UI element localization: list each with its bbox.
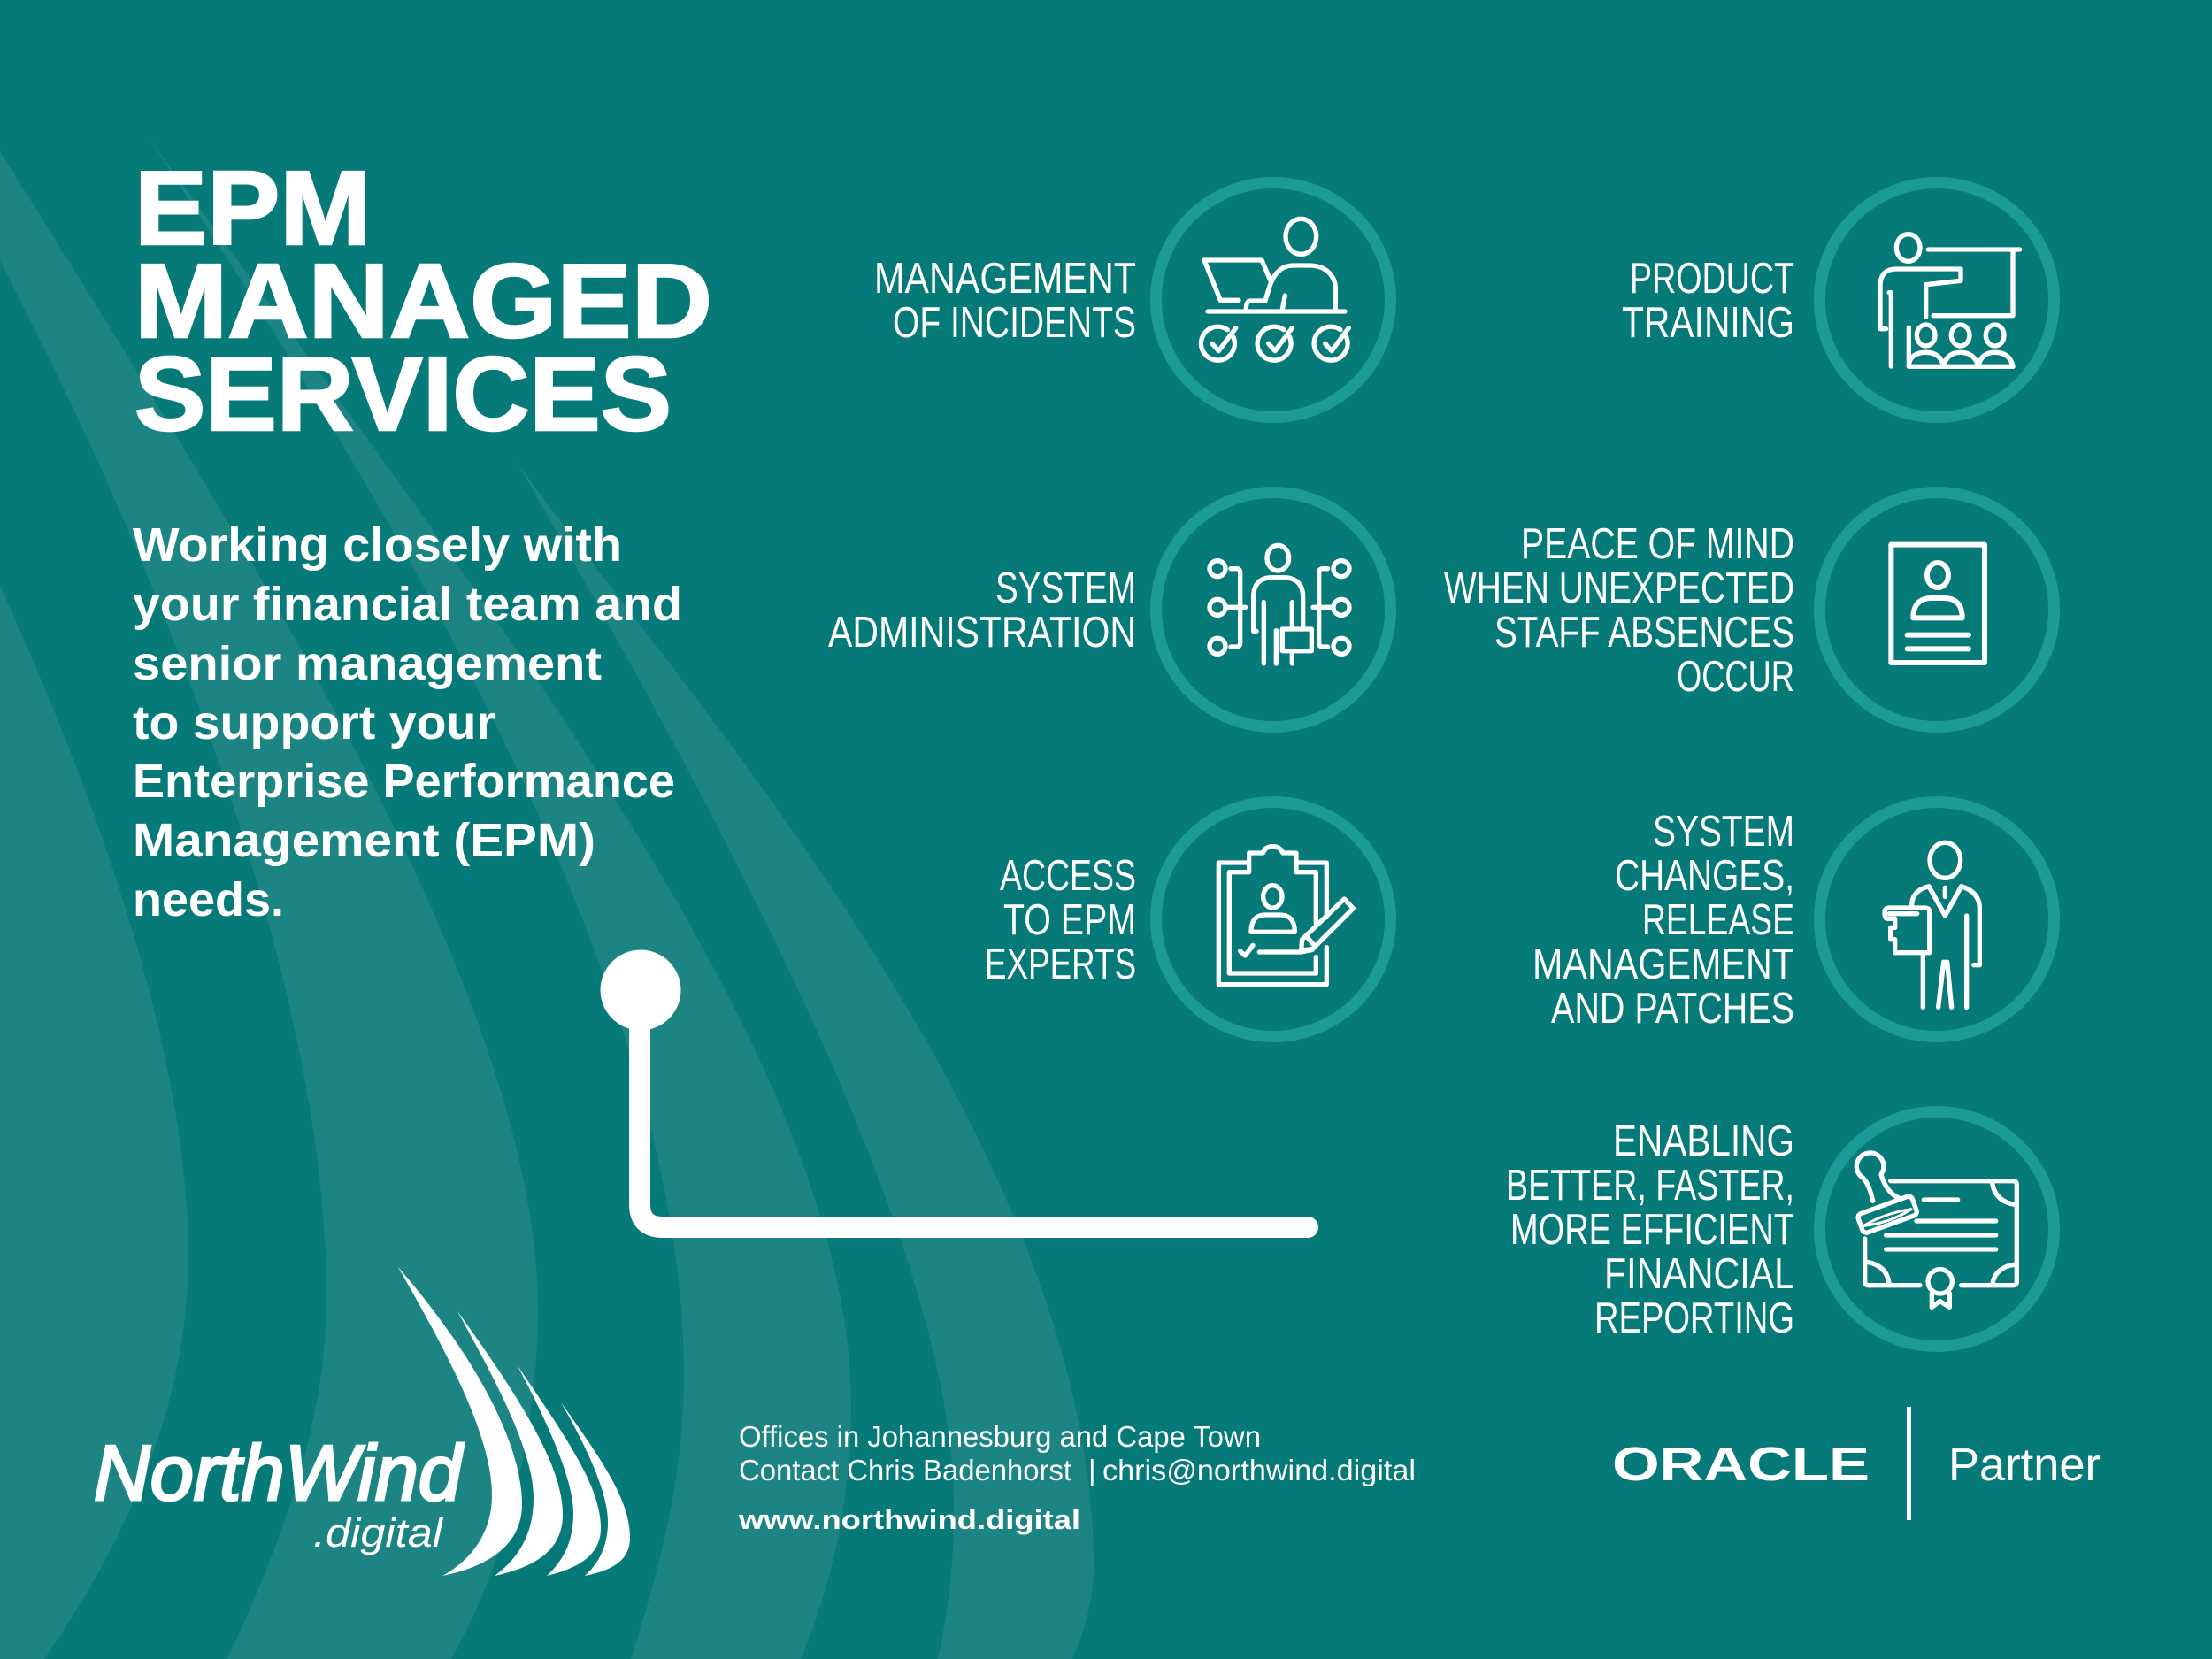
intro text block: to support your (133, 696, 495, 749)
label: system changes: MANAGEMENT (1532, 941, 1794, 988)
label: management of incidents (874, 255, 1136, 347)
contact details: www.northwind.digital (738, 1504, 1080, 1535)
logo: Oracle Partner: ORACLE (1612, 1438, 1870, 1491)
intro text block: Management (EPM) (133, 814, 595, 867)
contact details: Contact Chris Badenhorst (739, 1454, 1071, 1486)
icon: administrator with nodes (1210, 545, 1349, 664)
icon: stamped certificate (1856, 1153, 2016, 1307)
label: management of incidents: MANAGEMENT (874, 255, 1136, 303)
label: peace of mind: PEACE OF MIND (1521, 520, 1794, 568)
label: product training (1622, 255, 1794, 347)
logo: NorthWind digital (94, 1267, 630, 1576)
title: EPM (134, 150, 371, 267)
ring: product training (1819, 182, 2055, 418)
ring: system administration (1156, 492, 1391, 727)
ring: peace of mind (1819, 492, 2055, 727)
label: peace of mind: OCCUR (1677, 653, 1794, 701)
label: system changes: CHANGES, (1615, 852, 1794, 900)
label: enabling better reporting: REPORTING (1594, 1294, 1794, 1342)
label: enabling better reporting (1506, 1118, 1794, 1342)
intro text block: Enterprise Performance (133, 755, 675, 808)
title: SERVICES (134, 335, 672, 453)
ring: access to epm experts (1156, 802, 1391, 1037)
background swooshes (0, 139, 1094, 1659)
label: peace of mind (1444, 520, 1794, 701)
logo: Oracle Partner: Partner (1948, 1440, 2101, 1491)
label: system changes (1532, 808, 1794, 1033)
ring: enabling better reporting (1819, 1111, 2055, 1347)
label: peace of mind: STAFF ABSENCES (1494, 609, 1794, 657)
label: enabling better reporting: MORE EFFICIENT (1510, 1206, 1794, 1254)
logo domain: .digital (313, 1510, 444, 1555)
intro text block: Working closely with (133, 518, 622, 572)
icon: clipboard with pencil (1218, 847, 1353, 985)
contact details: chris@northwind.digital (1102, 1454, 1416, 1486)
ring: management of incidents (1156, 182, 1391, 418)
logo wordmark: NorthWind (94, 1429, 465, 1517)
label: system changes: AND PATCHES (1551, 985, 1794, 1033)
logo sails (398, 1267, 630, 1576)
contact details: | (1088, 1454, 1096, 1486)
intro text block: needs. (133, 873, 284, 926)
contact details (738, 1420, 1416, 1535)
connector line with dot (600, 950, 1308, 1227)
label: system administration (828, 565, 1136, 657)
label: enabling better reporting: BETTER, FASTER, (1506, 1162, 1794, 1210)
label: system changes: RELEASE (1642, 896, 1794, 944)
label: access to epm experts: TO EPM (1003, 896, 1136, 944)
label: system administration: ADMINISTRATION (828, 609, 1136, 657)
label: enabling better reporting: FINANCIAL (1604, 1250, 1794, 1298)
label: system changes: SYSTEM (1653, 808, 1794, 856)
ring: system changes (1819, 802, 2055, 1037)
contact details: Offices in Johannesburg and Cape Town (739, 1420, 1261, 1453)
label: enabling better reporting: ENABLING (1613, 1118, 1794, 1165)
label: product training: TRAINING (1622, 299, 1794, 347)
logo: Oracle Partner (1612, 1407, 2101, 1520)
icon: consultant with folder (1885, 842, 1979, 1007)
label: access to epm experts: ACCESS (1000, 852, 1136, 900)
label: peace of mind: WHEN UNEXPECTED (1444, 565, 1794, 612)
intro text block (133, 518, 682, 926)
intro text block: senior management (133, 637, 602, 690)
title (134, 150, 712, 453)
intro text block: your financial team and (133, 578, 682, 631)
label: access to epm experts: EXPERTS (985, 941, 1136, 988)
icon: person at laptop with checks (1201, 219, 1348, 360)
label: system administration: SYSTEM (995, 565, 1136, 612)
label: management of incidents: OF INCIDENTS (893, 299, 1136, 347)
label: access to epm experts (985, 852, 1136, 988)
label: product training: PRODUCT (1630, 255, 1794, 303)
icon: staff profile card (1891, 545, 1985, 663)
icon: trainer at board (1880, 234, 2020, 366)
title: MANAGED (134, 242, 712, 360)
